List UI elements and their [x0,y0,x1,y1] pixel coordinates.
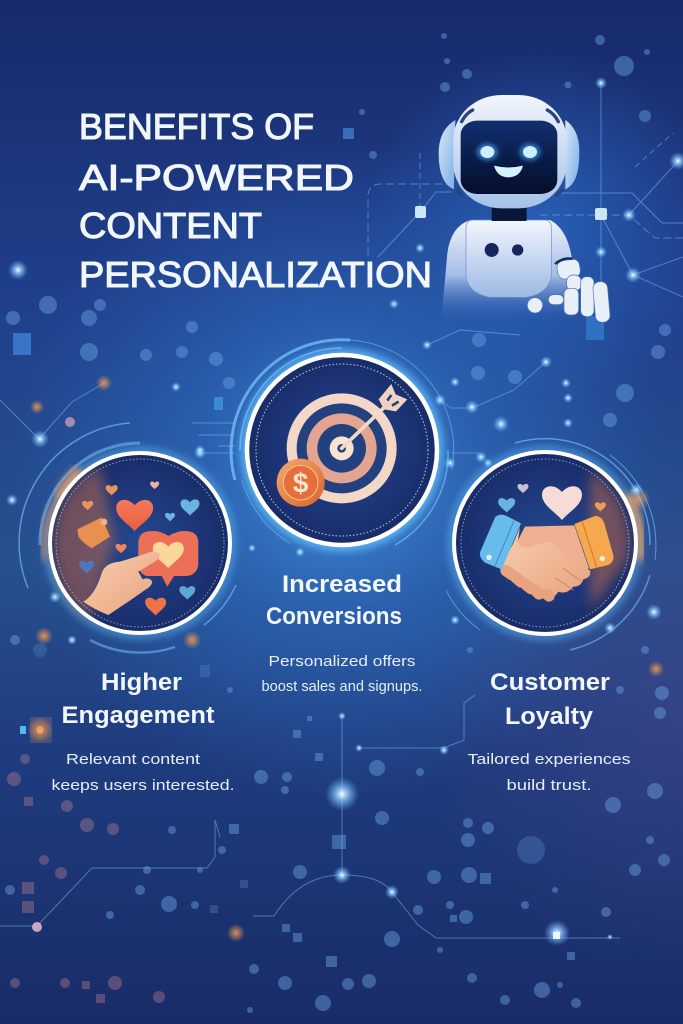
text: higher engagement description: Relevant content [66,752,200,768]
icon: orange cuff [574,516,614,569]
robot head [453,95,567,208]
robot chest dots [485,243,523,257]
icon: hearts above handshake [498,484,606,520]
icon: pointing hand [83,551,160,615]
heading: higher engagement: Higher [101,669,182,696]
heading: increased conversions: Increased [282,571,402,598]
robot smile [494,166,523,177]
icon: hearts [79,482,199,615]
panel: higher engagement icon [44,451,232,635]
text: increased conversions description: boost sales and signups. [262,679,422,695]
robot head slots [457,110,562,195]
bright square pixels [13,128,607,939]
icon: arrow [342,384,407,448]
robot neck [492,205,527,221]
heading: higher engagement: Engagement [62,702,214,729]
icon: robot [439,95,611,323]
icon: target [287,393,397,503]
heading: customer loyalty [490,669,610,730]
text: increased conversions description [262,654,422,695]
heading: customer loyalty: Customer [490,669,610,696]
title: BENEFITS OF [79,106,314,147]
warm accent particles [7,375,664,1003]
icon: thumbs-up hand [77,517,110,548]
text: higher engagement description: keeps users interested. [52,778,234,794]
connecting rings around circles [19,340,656,653]
robot screen [461,121,557,194]
icon: heart speech bubble [138,531,198,587]
heading: higher engagement [62,669,214,729]
text: customer loyalty description: build trust. [506,778,592,794]
heading: increased conversions [266,571,402,630]
heading: increased conversions: Conversions [266,603,402,630]
icon: handshake [500,525,590,599]
icon: blue cuff [480,515,521,569]
title [79,106,432,295]
robot ears [439,120,579,189]
text: higher engagement description [52,752,234,794]
icon disc [248,356,436,544]
panel: customer loyalty icon [452,450,641,636]
title: AI-POWERED [79,157,354,198]
robot torso [441,220,577,320]
text: customer loyalty description: Tailored experiences [468,752,630,768]
panel: increased conversions icon [246,354,438,546]
robot hand [527,258,611,323]
heading: customer loyalty: Loyalty [505,703,593,730]
icon: coin: $ [293,468,309,499]
square data pixels [200,665,575,967]
title: PERSONALIZATION [79,254,432,295]
text: increased conversions description: Personalized offers [268,654,416,670]
title: CONTENT [79,205,262,246]
robot eyes [477,143,541,161]
text: customer loyalty description [468,752,630,794]
robot chest plate [466,220,551,297]
